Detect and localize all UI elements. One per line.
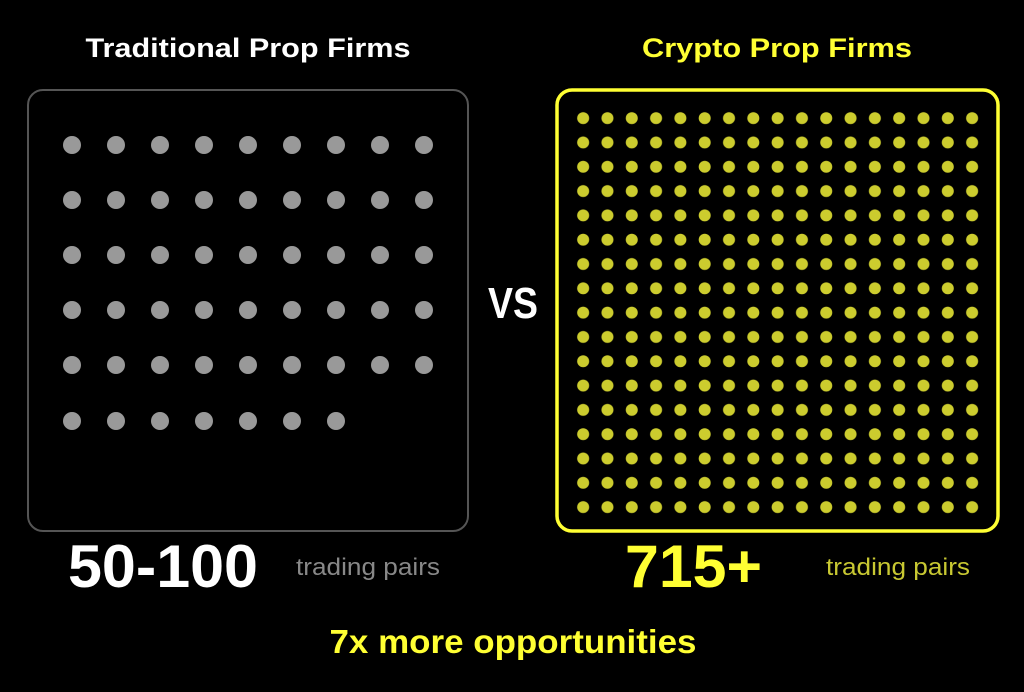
panel: traditional dots <box>28 90 468 531</box>
panel: crypto dots <box>557 90 998 531</box>
stat: 50-100 trading pairs: 50-100 <box>68 533 258 600</box>
stat: 715+ trading pairs <box>625 533 970 600</box>
footer: 7x more opportunities: 7x more opportunities <box>330 623 696 660</box>
stat: 50-100 trading pairs: trading pairs <box>296 554 440 581</box>
stat: 715+ trading pairs: 715+ <box>625 533 762 600</box>
title: Traditional Prop Firms: Traditional Prop Firms <box>86 33 410 63</box>
stat: 715+ trading pairs: trading pairs <box>826 554 970 581</box>
stat: 50-100 trading pairs <box>68 533 440 600</box>
title: Crypto Prop Firms: Crypto Prop Firms <box>642 33 912 63</box>
VS label: VS <box>488 279 538 328</box>
